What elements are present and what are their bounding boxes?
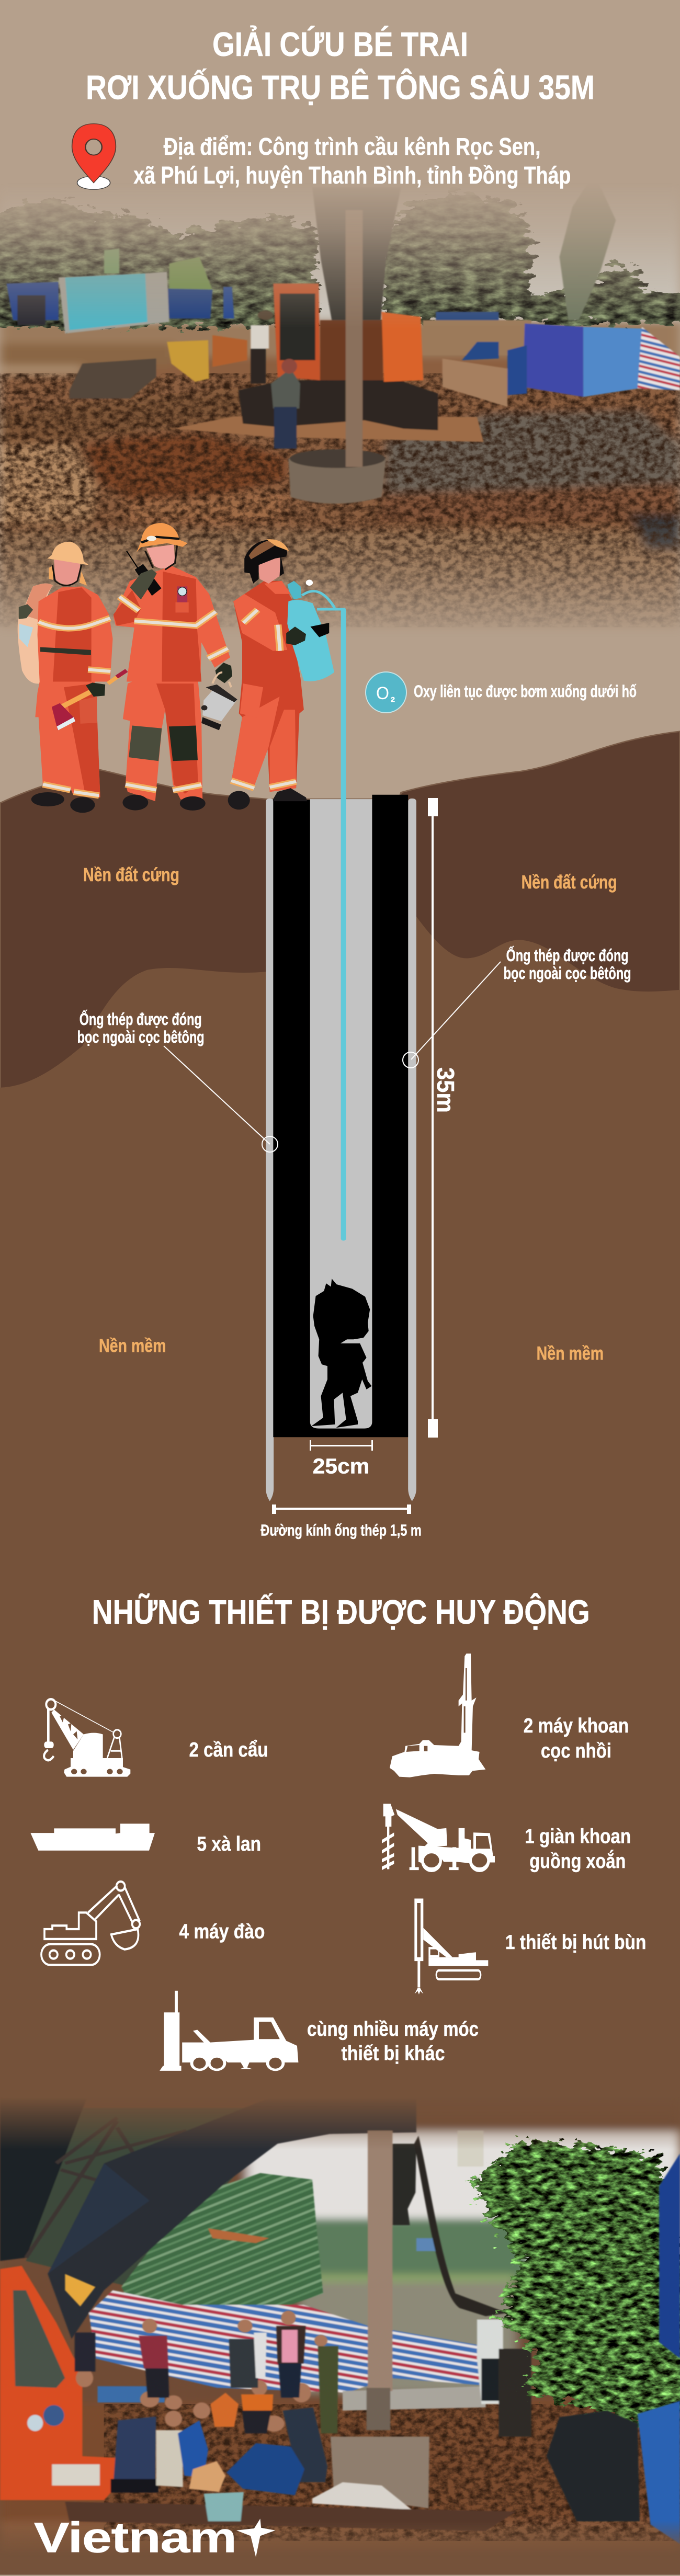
logo: Vietnam+: Vietnam xyxy=(34,2514,236,2561)
title: GIẢI CỨU BÉ TRAI xyxy=(212,25,468,63)
label: soft ground left: Nền mềm xyxy=(99,1335,166,1357)
label: excavators: 4 máy đào xyxy=(179,1921,265,1943)
label: other machinery xyxy=(307,2018,479,2065)
icon: auger rig xyxy=(382,1804,495,1870)
foliage xyxy=(473,2140,680,2427)
callout: steel tube right xyxy=(403,946,631,1068)
label: bored pile drills xyxy=(524,1715,629,1762)
oxygen tube xyxy=(341,610,347,1239)
diagram: steel casing and shaft xyxy=(266,610,416,1501)
icon: oxygen badge: O xyxy=(376,683,389,703)
icon: barge xyxy=(30,1823,155,1851)
firefighter right xyxy=(228,539,344,816)
dimension: 25cm: 25cm xyxy=(313,1454,369,1478)
trees xyxy=(0,193,680,327)
label: bored pile drills: 2 máy khoan xyxy=(524,1715,629,1737)
label: other machinery: cùng nhiều máy móc xyxy=(307,2018,479,2041)
logo: Vietnam+ xyxy=(34,2514,275,2561)
ground texture xyxy=(104,2404,680,2541)
title xyxy=(86,25,595,107)
label: auger rig xyxy=(525,1825,631,1873)
label: soft ground right: Nền mềm xyxy=(537,1342,604,1364)
dimension: depth 35m: 35m xyxy=(432,1067,459,1113)
shaft interior xyxy=(310,799,372,1429)
silhouette: trapped boy xyxy=(311,1279,372,1428)
label: bored pile drills: cọc nhồi xyxy=(541,1740,611,1762)
dimension: depth 35m xyxy=(428,798,459,1438)
firefighter middle xyxy=(114,523,237,811)
dimension: 25cm xyxy=(310,1440,373,1478)
callout: steel tube left: bọc ngoài cọc bêtông xyxy=(77,1028,205,1046)
photo: rescue site xyxy=(0,2092,680,2557)
label: barges: 5 xà lan xyxy=(197,1833,261,1855)
icon: oxygen badge: 2 xyxy=(391,696,395,703)
firefighters xyxy=(18,523,344,816)
icon: drilling truck xyxy=(390,1654,485,1777)
callout: steel tube right: Ống thép được đóng xyxy=(506,946,629,965)
icon: pile truck xyxy=(160,1991,298,2071)
title: RƠI XUỐNG TRỤ BÊ TÔNG SÂU 35M xyxy=(86,68,595,107)
label: cranes: 2 cần cẩu xyxy=(189,1739,268,1761)
location text: xã Phú Lợi, huyện Thanh Bình, tỉnh Đồng Tháp xyxy=(133,162,571,189)
callout: steel tube left: Ống thép được đóng xyxy=(80,1010,202,1029)
ground texture xyxy=(0,373,680,627)
icon: location pin xyxy=(72,124,116,189)
icon: mud suction rig xyxy=(414,1899,488,1994)
label: mud suction: 1 thiết bị hút bùn xyxy=(505,1931,646,1954)
icon: crane xyxy=(44,1699,130,1777)
label: hard ground left: Nền đất cứng xyxy=(83,864,179,885)
location text: Địa điểm: Công trình cầu kênh Rọc Sen, xyxy=(164,133,541,160)
label: auger rig: 1 giàn khoan xyxy=(525,1825,631,1848)
ground layers xyxy=(0,732,680,2574)
location text xyxy=(133,133,571,189)
firefighter left xyxy=(18,542,127,813)
heading: equipment: NHỮNG THIẾT BỊ ĐƯỢC HUY ĐỘNG xyxy=(92,1593,590,1631)
icon: oxygen badge xyxy=(366,672,406,713)
people xyxy=(76,2311,327,2432)
dimension: steel tube diameter xyxy=(260,1504,422,1539)
callout: steel tube right: bọc ngoài cọc bêtông xyxy=(504,964,631,983)
outer steel tube xyxy=(266,799,416,1501)
callout: steel tube left xyxy=(77,1010,278,1152)
label: auger rig: guồng xoắn xyxy=(529,1850,626,1873)
label: hard ground right: Nền đất cứng xyxy=(522,871,617,893)
label: other machinery: thiết bị khác xyxy=(341,2043,445,2065)
dimension: steel tube diameter: Đường kính ống thép 1,5 m xyxy=(260,1521,422,1539)
icon: excavator xyxy=(41,1882,140,1965)
concrete pile black walls xyxy=(273,795,408,1437)
photo: construction site xyxy=(0,174,680,630)
